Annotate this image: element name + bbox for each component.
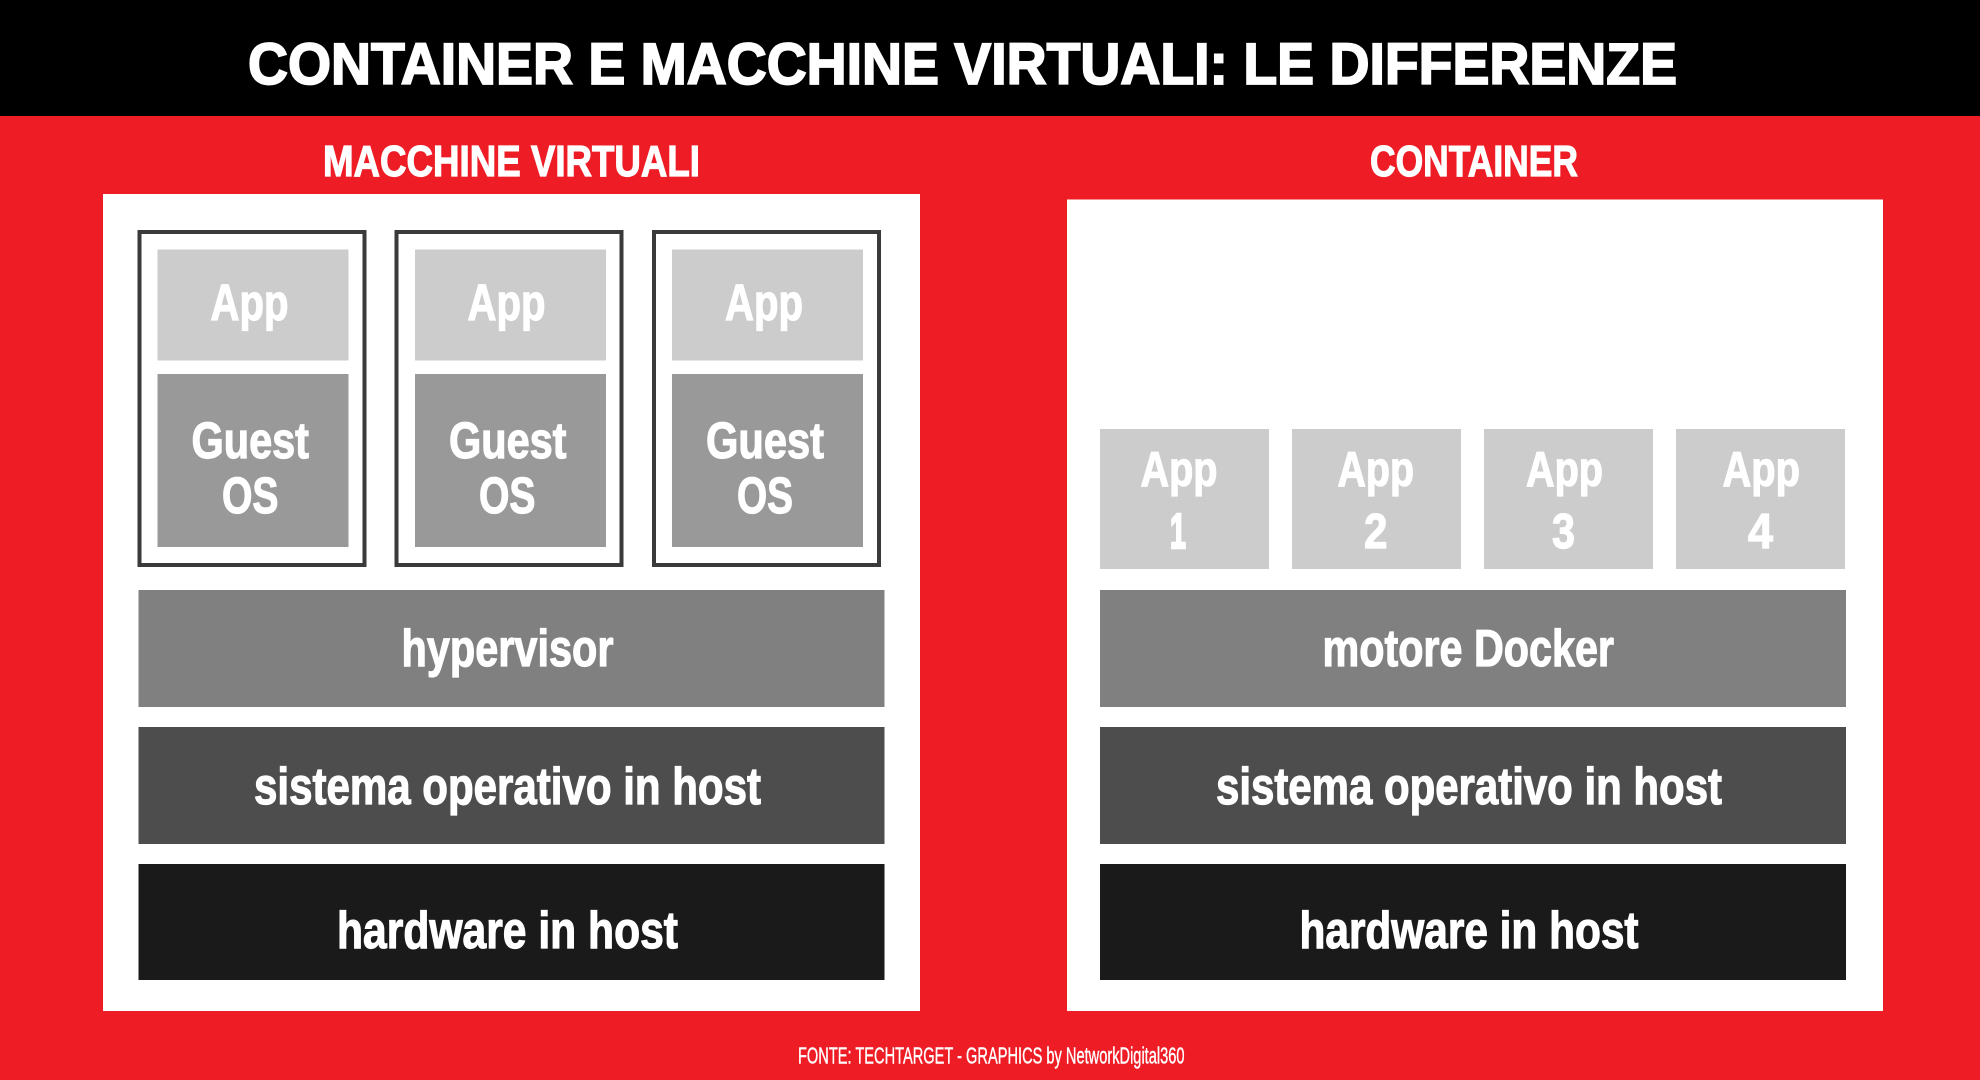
layer: sistema operativo in host bbox=[138, 727, 884, 844]
app 1: App bbox=[1140, 443, 1218, 497]
layer: hardware in host bbox=[138, 864, 884, 980]
virtual machine 1: Guest bbox=[192, 412, 309, 469]
app 3 bbox=[1484, 429, 1653, 569]
virtual machine 2: Guest bbox=[449, 412, 567, 469]
app 2 bbox=[1292, 429, 1461, 569]
virtual machine 2: App bbox=[468, 274, 546, 331]
layer: motore Docker: motore Docker bbox=[1322, 620, 1614, 678]
app 3: 3 bbox=[1552, 505, 1575, 559]
app 4 bbox=[1676, 429, 1845, 569]
virtual machine 3 bbox=[654, 232, 879, 565]
layer: hypervisor: hypervisor bbox=[402, 620, 614, 678]
panel: container bbox=[1067, 200, 1883, 1011]
app 4: App bbox=[1722, 443, 1800, 497]
layer: hypervisor bbox=[138, 590, 884, 707]
layer: sistema operativo in host bbox=[1100, 727, 1846, 844]
heading: container: CONTAINER bbox=[1370, 137, 1578, 186]
app 1: 1 bbox=[1170, 505, 1186, 559]
virtual machine 2 bbox=[396, 232, 622, 565]
virtual machine 1: App bbox=[210, 274, 288, 331]
virtual machine 3: OS bbox=[737, 467, 793, 524]
layer: hardware in host bbox=[1100, 864, 1846, 980]
virtual machine 3: App bbox=[725, 274, 803, 331]
title banner bbox=[0, 0, 1980, 116]
virtual machine 1: OS bbox=[222, 467, 278, 524]
virtual machine 2: OS bbox=[479, 467, 536, 524]
app 1 bbox=[1100, 429, 1269, 569]
app 2: App bbox=[1338, 443, 1414, 497]
layer: motore Docker bbox=[1100, 590, 1846, 707]
app 3: App bbox=[1526, 443, 1603, 497]
footer source credit: FONTE: TECHTARGET - GRAPHICS by NetworkDigital360 bbox=[798, 1042, 1184, 1068]
app 2: 2 bbox=[1364, 505, 1388, 559]
panel: macchine virtuali bbox=[103, 194, 920, 1011]
layer: sistema operativo in host: sistema operativo in host bbox=[254, 758, 761, 816]
heading: macchine virtuali: MACCHINE VIRTUALI bbox=[323, 137, 700, 186]
title banner: CONTAINER E MACCHINE VIRTUALI: LE DIFFERENZE bbox=[248, 32, 1677, 97]
app 4: 4 bbox=[1748, 505, 1773, 559]
layer: sistema operativo in host: sistema operativo in host bbox=[1216, 758, 1722, 816]
virtual machine 1 bbox=[140, 232, 364, 565]
layer: hardware in host: hardware in host bbox=[337, 902, 678, 960]
layer: hardware in host: hardware in host bbox=[1300, 902, 1638, 960]
virtual machine 3: Guest bbox=[706, 412, 824, 469]
